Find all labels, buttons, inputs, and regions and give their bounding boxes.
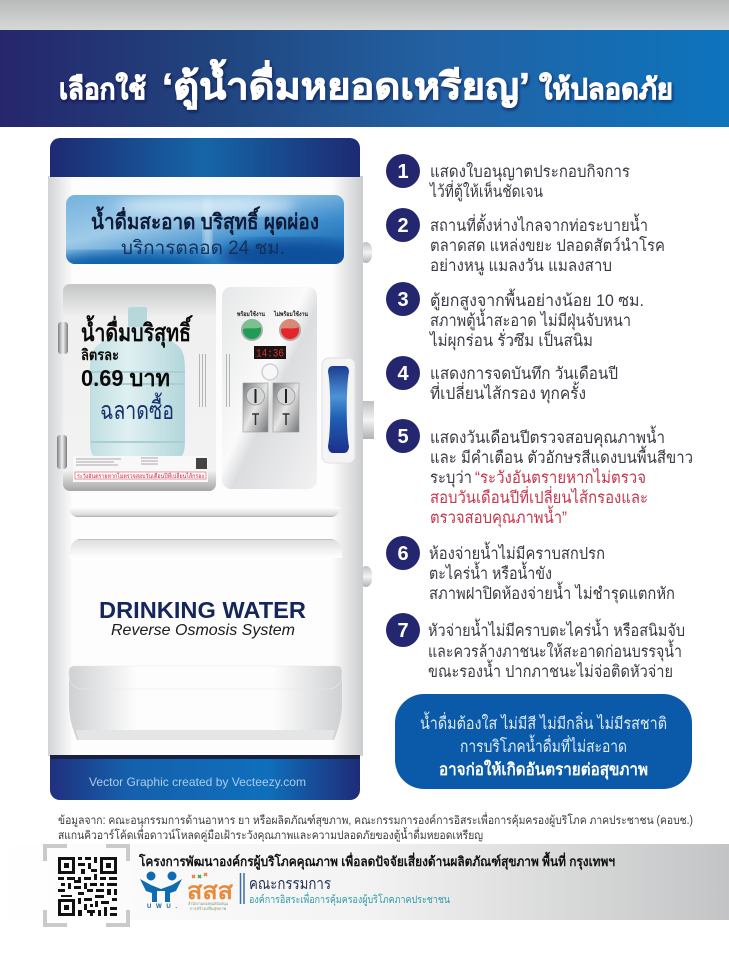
cabinet bottom cap: Vector Graphic created by Vecteezy.com: [89, 775, 306, 789]
item 6: ห้องจ่ายน้ำไม่มีคราบสกปรก: [429, 541, 605, 563]
source note: [58, 812, 693, 842]
logo: ThaiHealth: การสร้างเสริมสุขภาพ: [190, 906, 226, 912]
item 5: [386, 419, 693, 528]
logo: UWU: UWU.: [147, 904, 177, 910]
callout: [395, 694, 692, 789]
item 3: [386, 282, 644, 351]
item 5: ระบุว่า: [430, 469, 472, 488]
item 2: 2: [397, 215, 409, 237]
logo: UWU: [140, 872, 182, 910]
item 6: [386, 536, 675, 604]
item 5: “ระวังอันตรายหากไม่ตรวจ: [475, 468, 646, 487]
price text: ลิตรละ: [81, 346, 119, 364]
logo: ThaiHealth: สสส: [187, 878, 233, 905]
door handles: [58, 322, 68, 354]
coin slot left: [243, 383, 268, 432]
drip tray: [69, 666, 342, 740]
water banner panel: น้ำดื่มสะอาด บริสุทธิ์ ผุดผ่อง: [91, 206, 319, 236]
item 7: ขณะรองน้ำ ปากภาชนะไม่จ่อติดหัวจ่าย: [428, 659, 673, 681]
item 1: 1: [397, 161, 409, 183]
item 5: 5: [397, 426, 409, 448]
cabinet top cap: [50, 138, 360, 177]
item 2: สถานที่ตั้งห่างไกลจากท่อระบายน้ำ: [430, 213, 648, 235]
item 6: 6: [397, 543, 409, 565]
red lamp: [279, 319, 301, 341]
item 3: ไม่ผุกร่อน รั่วซึม เป็นสนิม: [428, 329, 593, 351]
price text: 0.69 บาท: [81, 365, 170, 391]
side knobs and connector: [360, 242, 374, 587]
white permit label: ระวังอันตรายหากไม่ตรวจสอบวันเดือนปีที่เปลี่ยนไส้กรอง: [77, 472, 204, 480]
item 6: สภาพฝาปิดห้องจ่ายน้ำ ไม่ชำรุดแตกหัก: [429, 581, 675, 604]
logo: ThaiHealth: สำนักงานกองทุนสนับสนุน: [188, 901, 228, 907]
item 2: อย่างหนู แมลงวัน แมลงสาบ: [430, 257, 612, 276]
logo: consumer council: คณะกรรมการ: [249, 876, 331, 893]
left price panel: [57, 284, 216, 491]
water dispenser cabinet: [48, 138, 374, 800]
title text: ให้ปลอดภัย: [539, 72, 673, 106]
item 4: [386, 356, 618, 404]
water banner panel: บริการตลอด 24 ชม.: [121, 238, 285, 259]
water banner panel: [66, 195, 344, 264]
drinking water label: DRINKING WATER: [99, 597, 306, 623]
item 6: ตะไคร่น้ำ หรือน้ำขัง: [429, 561, 552, 583]
item 7: และควรล้างภาชนะให้สะอาดก่อนบรรจุน้ำ: [428, 639, 682, 662]
shelf strip: [69, 507, 340, 517]
coin slot right: [273, 383, 299, 432]
callout: การบริโภคน้ำดื่มที่ไม่สะอาด: [460, 734, 627, 756]
control panel: ไม่พร้อมใช้งาน: [273, 310, 309, 318]
item 4: ที่เปลี่ยนไส้กรอง ทุกครั้ง: [430, 381, 586, 404]
item 7: [386, 613, 685, 681]
item 5: และ มีคำเตือน ตัวอักษรสีแดงบนพื้นสีขาว: [430, 445, 693, 467]
item 5: ตรวจสอบคุณภาพน้ำ”: [430, 505, 567, 528]
price text: ฉลาดซื้อ: [100, 392, 174, 425]
item 1: แสดงใบอนุญาตประกอบกิจการ: [430, 162, 630, 182]
item 5: แสดงวันเดือนปีตรวจสอบคุณภาพน้ำ: [430, 425, 665, 448]
item 2: ตลาดสด แหล่งขยะ ปลอดสัตว์นำโรค: [430, 236, 665, 255]
item 3: ตู้ยกสูงจากพื้นอย่างน้อย 10 ซม.: [430, 288, 644, 311]
item 2: [386, 208, 665, 276]
water bottle: [90, 307, 185, 457]
item 4: 4: [397, 363, 409, 385]
item 1: ไว้ที่ตู้ให้เห็นชัดเจน: [428, 180, 543, 202]
control panel: [222, 287, 317, 489]
cabinet body: [48, 176, 363, 756]
item 4: แสดงการจดบันทึก วันเดือนปี: [430, 365, 618, 383]
push button: [262, 364, 278, 380]
drinking water label: Reverse Osmosis System: [111, 622, 295, 639]
item 3: 3: [397, 289, 409, 311]
item 1: [386, 154, 630, 202]
white permit label: [73, 456, 208, 482]
source note: สแกนคิวอาร์โค้ดเพื่อดาวน์โหลดคู่มือเฝ้าระวังคุณภาพและความปลอดภัยของตู้น้ำดื่มหยอดเหรียญ: [58, 827, 483, 842]
title text: ‘ตู้น้ำดื่มหยอดเหรียญ’: [162, 59, 530, 110]
callout: น้ำดื่มต้องใส ไม่มีสี ไม่มีกลิ่น ไม่มีรสชาติ: [420, 711, 667, 733]
status labels: พร้อมใช้งาน: [237, 310, 266, 318]
green lamp: [241, 319, 263, 341]
top grey band: [0, 0, 729, 30]
blue dispenser handle: [322, 358, 355, 463]
lower door: [70, 539, 342, 558]
digital clock: 14:36: [256, 348, 284, 360]
item 7: 7: [397, 620, 409, 642]
footer project heading: โครงการพัฒนาองค์กรผู้บริโภคคุณภาพ เพื่อลดปัจจัยเสี่ยงด้านผลิตภัณฑ์สุขภาพ พื้นที่ กรุงเทพฯ: [138, 851, 615, 870]
drinking water label: [99, 597, 306, 639]
callout: อาจก่อให้เกิดอันตรายต่อสุขภาพ: [439, 759, 648, 780]
QR code: [45, 846, 128, 925]
logo: consumer council: [240, 873, 450, 906]
item 3: สภาพตู้น้ำสะอาด ไม่มีฝุ่นจับหนา: [430, 308, 631, 331]
title text: [59, 59, 673, 110]
price text: [81, 314, 193, 425]
logo: consumer council: องค์การอิสระเพื่อการคุ้มครองผู้บริโภคภาคประชาชน: [249, 892, 450, 906]
logo: ThaiHealth: [187, 873, 233, 912]
item 5: สอบวันเดือนปีที่เปลี่ยนไส้กรองและ: [430, 486, 648, 507]
item 7: หัวจ่ายน้ำไม่มีคราบตะไคร่น้ำ หรือสนิมจับ: [428, 618, 685, 640]
title banner: [0, 30, 729, 127]
price text: น้ำดื่มบริสุทธิ์: [81, 314, 193, 349]
checklist: [386, 154, 693, 681]
cabinet bottom cap: [50, 755, 360, 800]
footer band: [0, 844, 729, 920]
vent lines: [200, 354, 206, 407]
title text: เลือกใช้: [59, 72, 146, 106]
